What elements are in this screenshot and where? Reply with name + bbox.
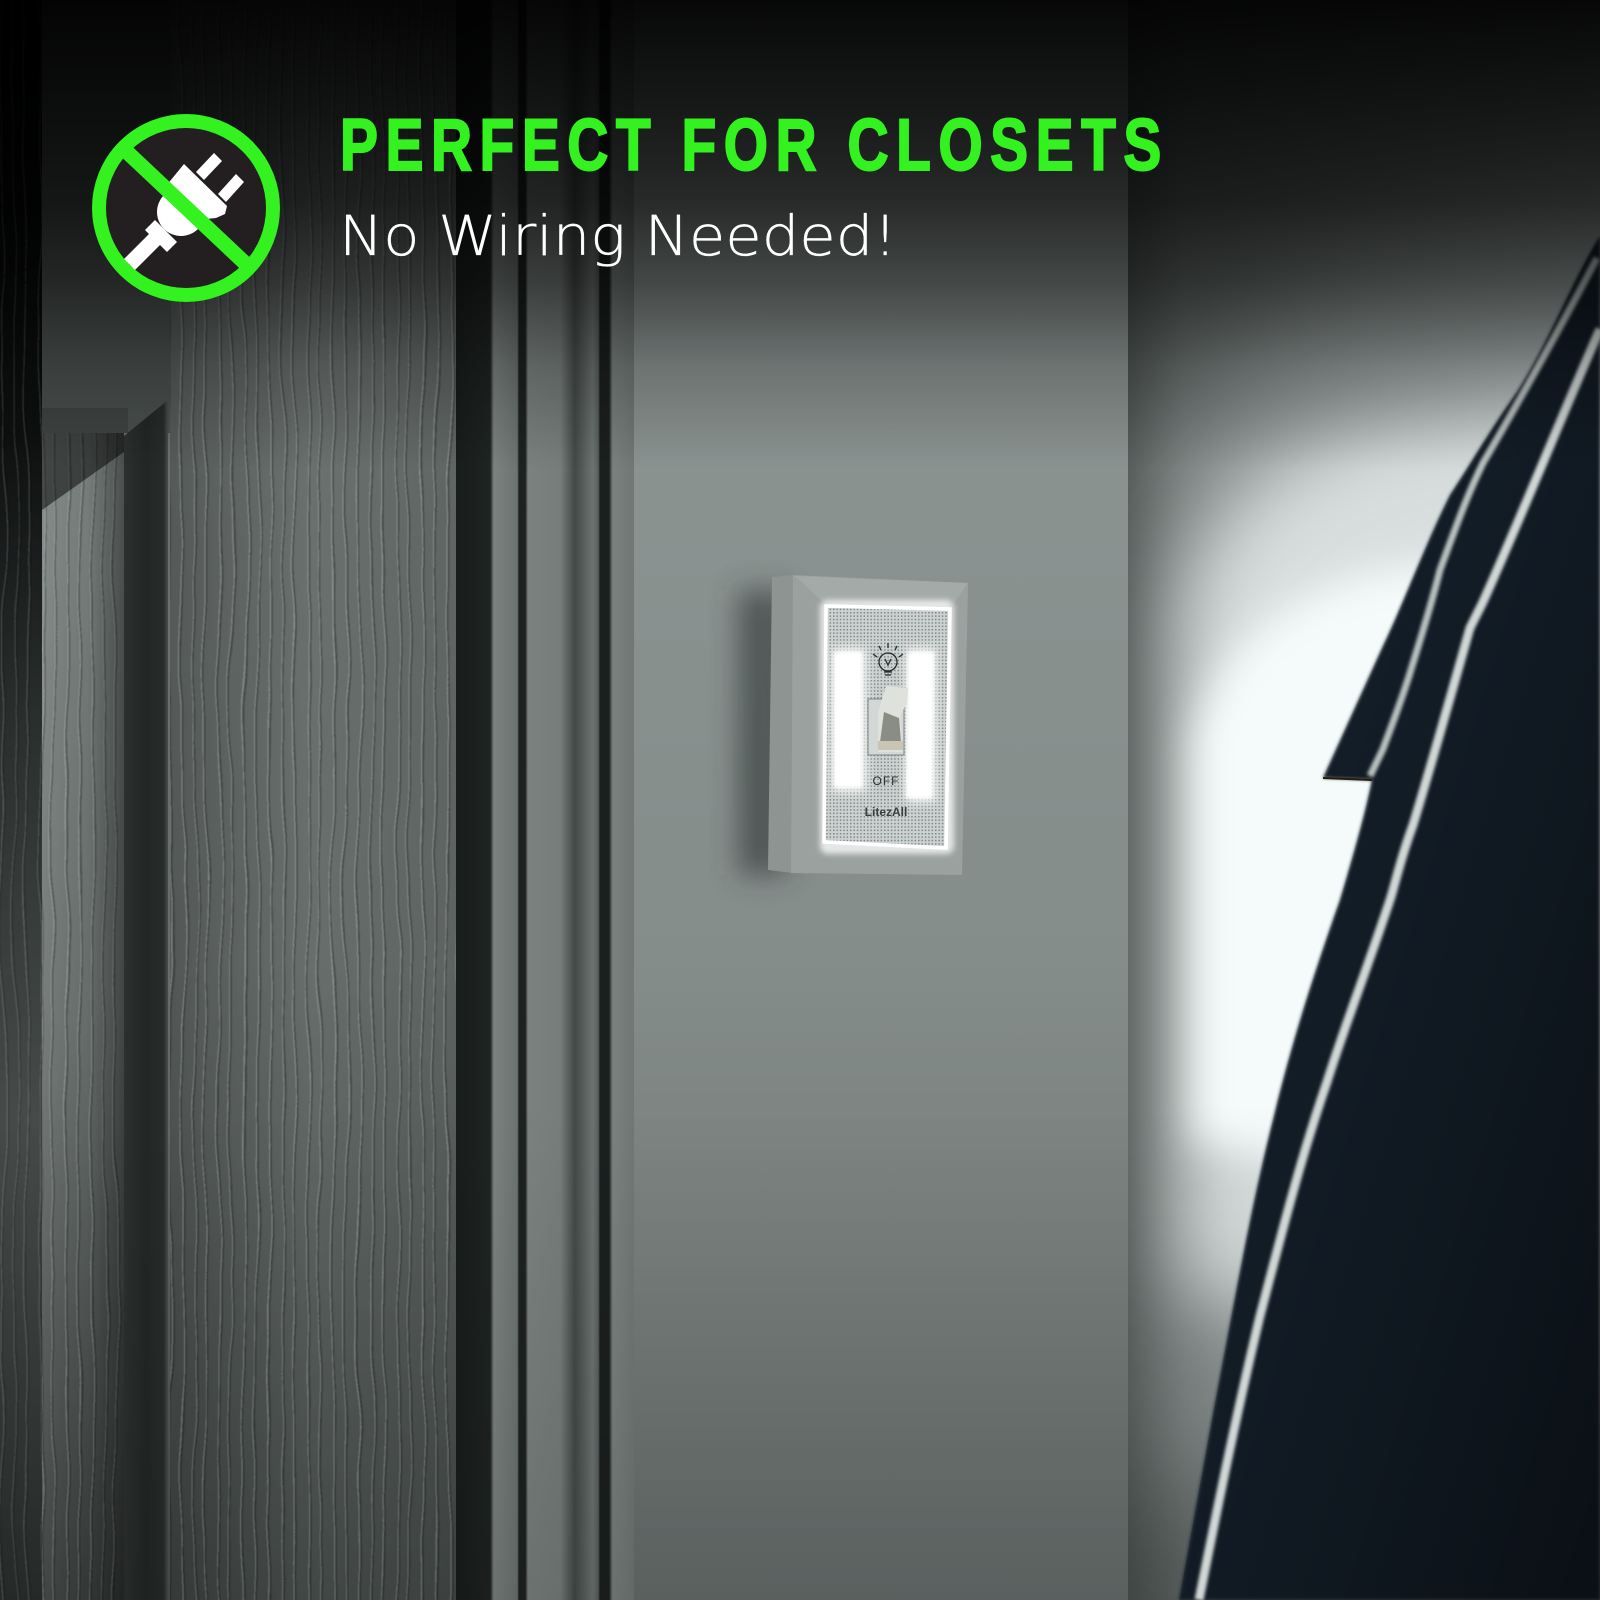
faceplate bevel [795, 576, 968, 605]
switch side band [768, 575, 795, 873]
left dark strip [0, 20, 42, 1600]
switch label OFF: OFF [872, 774, 900, 788]
coat shading [1179, 236, 1600, 1600]
brand label: LitezAll [865, 805, 907, 819]
prohibition slash [127, 152, 247, 265]
hanging coat silhouette [1179, 236, 1600, 1600]
bulb icon [873, 643, 903, 675]
door frame moulding [456, 0, 636, 1600]
right side wall [1128, 0, 1600, 1600]
overall bottom shading [0, 1100, 1600, 1600]
right LED glow [906, 648, 936, 802]
coat hem tip [1323, 778, 1372, 780]
icon: no wiring plug [99, 121, 273, 295]
switch shadow [738, 590, 788, 875]
left LED glow [832, 648, 866, 792]
heading: PERFECT FOR CLOSETS [340, 104, 1161, 186]
plug glyph [124, 153, 244, 270]
subheading: No Wiring Needed! [339, 204, 897, 268]
glow [820, 600, 954, 854]
wall switch light [738, 575, 968, 875]
coat stripe main [1199, 329, 1600, 1600]
top vignette [0, 0, 1600, 470]
lit mesh panel [826, 608, 948, 846]
right LED bar [906, 652, 934, 798]
recessed door panel [42, 408, 128, 1600]
door top rail above recessed panel [42, 0, 170, 433]
dark panel frame [124, 400, 168, 1600]
light pool on right wall [1165, 240, 1600, 1540]
wall with switch [634, 0, 1128, 1600]
door stile with wood grain [124, 9, 456, 1600]
left LED bar [834, 652, 862, 787]
coat stripe secondary [1370, 258, 1597, 776]
switch faceplate [791, 575, 968, 875]
toggle switch [868, 686, 908, 755]
panel bright border [824, 606, 950, 848]
